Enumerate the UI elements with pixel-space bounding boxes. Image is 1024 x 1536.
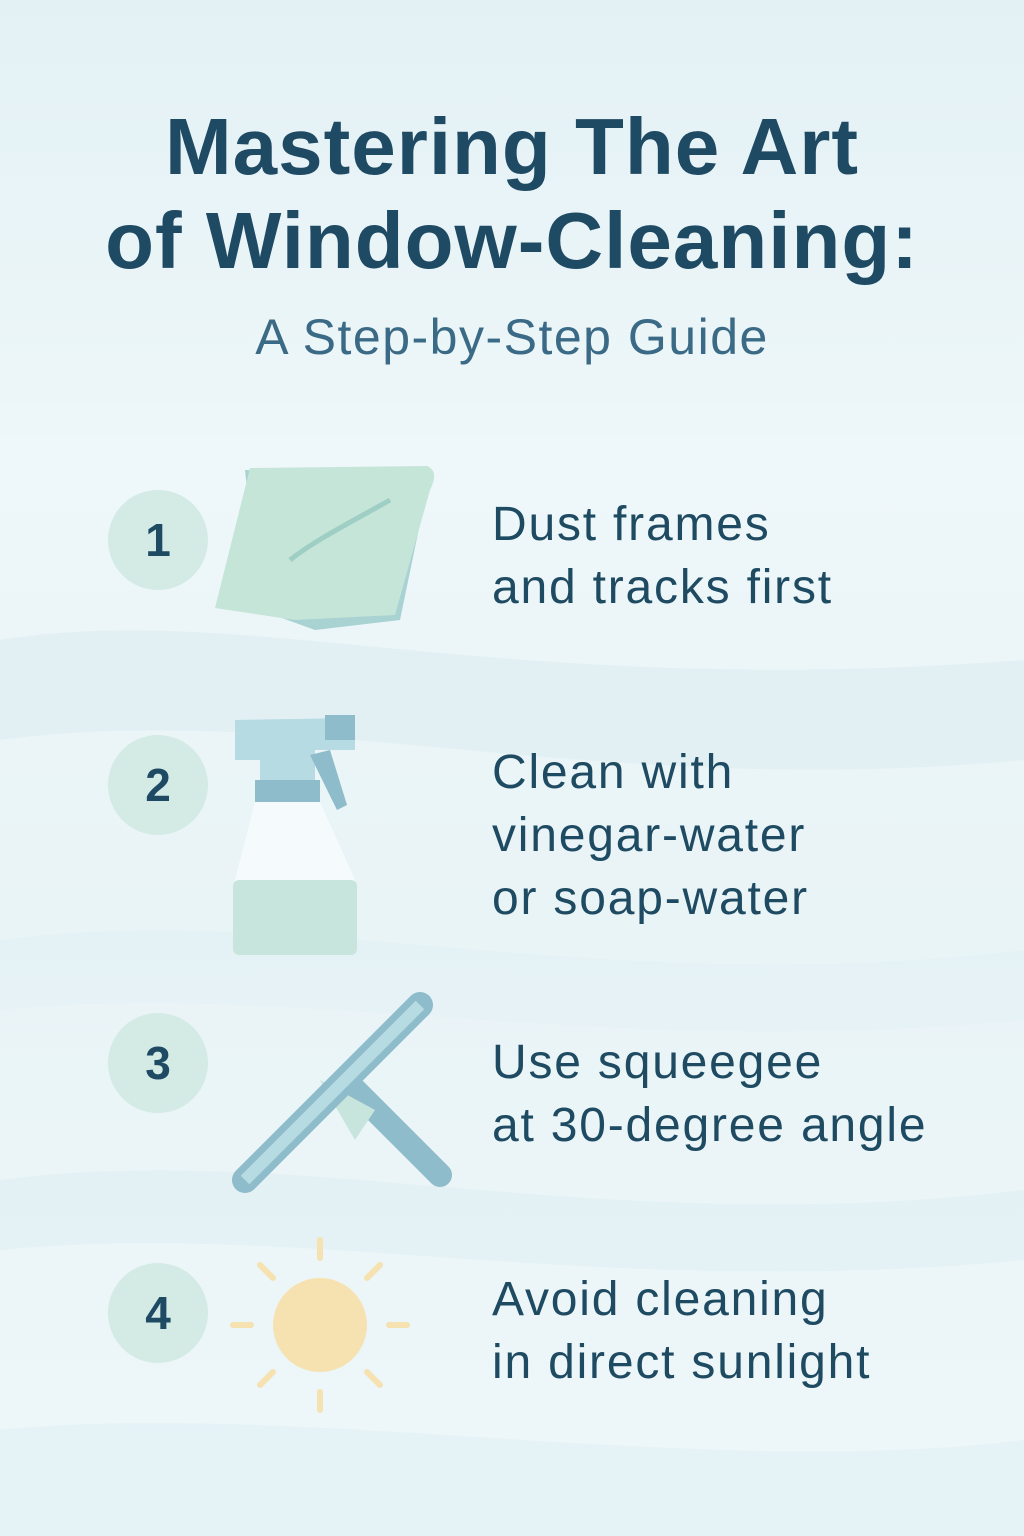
step 2 text: vinegar-water (492, 809, 806, 862)
step 3 text: Use squeegee (492, 1036, 823, 1089)
step 4 text: Avoid cleaning (492, 1273, 829, 1326)
step 2 text: or soap-water (492, 872, 809, 925)
step 4 number: 4 (145, 1287, 171, 1339)
step 1 text (492, 498, 833, 614)
step 2 text (492, 746, 809, 925)
step 3 text: at 30-degree angle (492, 1099, 927, 1152)
step 1 text: Dust frames (492, 498, 771, 551)
icon: spray bottle (233, 715, 357, 955)
step 2 number: 2 (145, 759, 171, 811)
step 1 number (108, 490, 208, 590)
subtitle: A Step-by-Step Guide (255, 309, 769, 365)
icon: cloth (215, 466, 434, 630)
step 2 number (108, 735, 208, 835)
step 1 text: and tracks first (492, 561, 833, 614)
step 4 number (108, 1263, 208, 1363)
title (105, 102, 919, 285)
step 2 text: Clean with (492, 746, 734, 799)
step 4 text (492, 1273, 871, 1389)
step 1 number: 1 (145, 514, 171, 566)
step 3 text (492, 1036, 927, 1152)
step 3 number (108, 1013, 208, 1113)
title: Mastering The Art (165, 102, 859, 191)
icon: squeegee (232, 992, 452, 1193)
step 4 text: in direct sunlight (492, 1336, 871, 1389)
icon: sun (230, 1237, 410, 1413)
title: of Window-Cleaning: (105, 196, 919, 285)
step 3 number: 3 (145, 1037, 171, 1089)
